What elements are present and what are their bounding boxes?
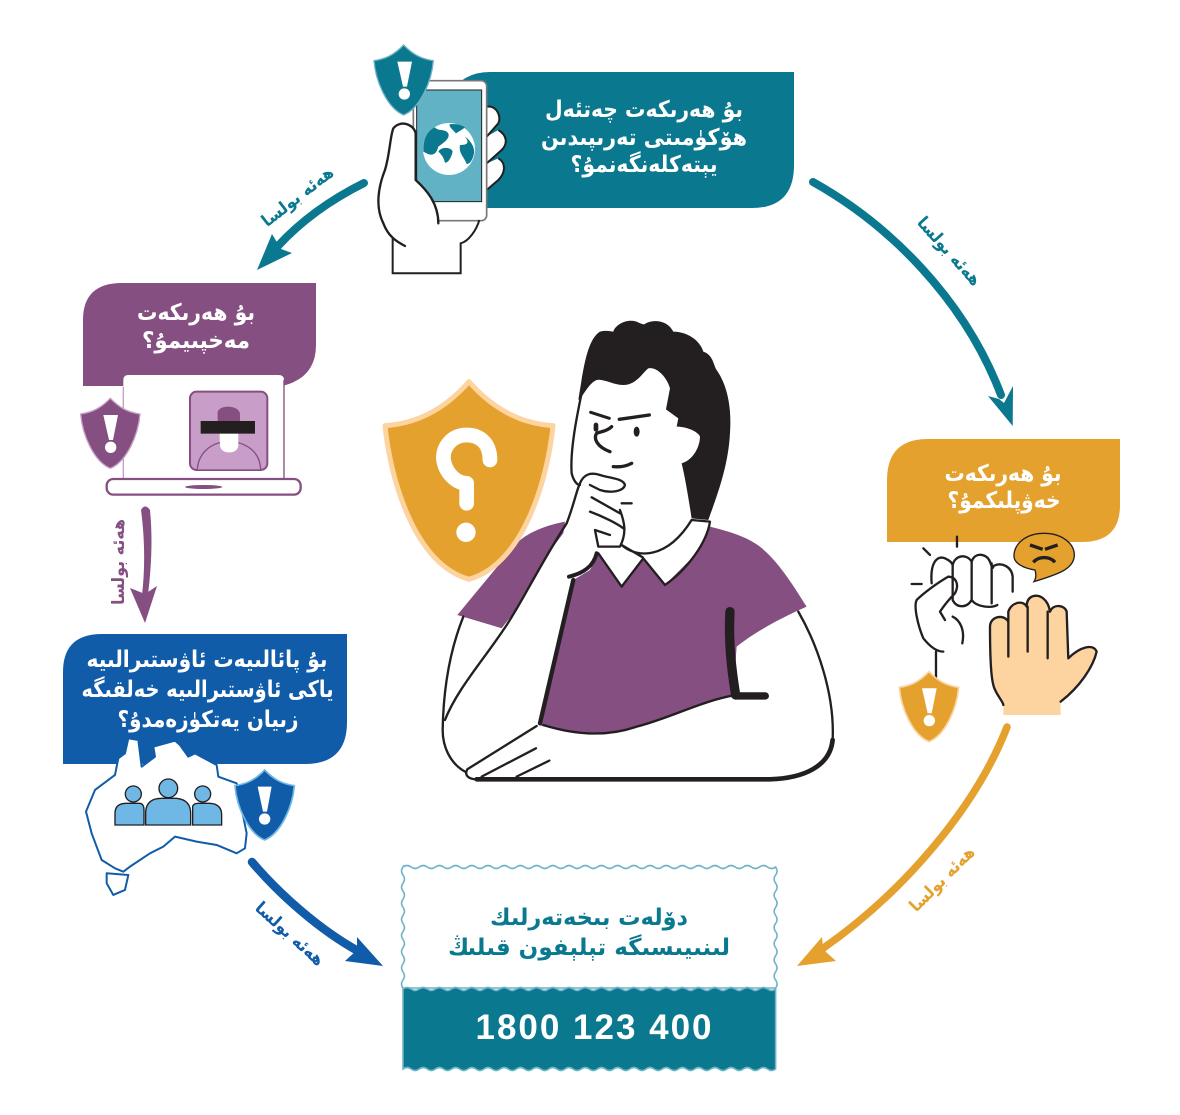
hotline text: [448, 905, 730, 961]
icon: teal warning shield: [374, 45, 433, 115]
arrow: purple to blue: [109, 506, 157, 623]
heading: teal question: [541, 97, 747, 178]
panel: dangerous question (orange): [887, 439, 1120, 742]
heading: orange question: [944, 461, 1062, 514]
icon: hand holding phone: [378, 81, 506, 273]
illustration: thinking man: [385, 321, 833, 779]
heading: teal question: بۇ ھەرىكەت چەتئەل: [545, 97, 743, 123]
heading: teal question: ھۆكۈمىتى تەرىپىدىن: [541, 125, 747, 151]
hotline text: دۆلەت بىخەتەرلىك: [490, 905, 688, 931]
arrow: teal to purple: [257, 163, 364, 270]
icon: purple warning shield: [81, 398, 140, 468]
heading: blue question: بۇ پائالىيەت ئاۋستىرالىيە: [86, 647, 328, 673]
man outlines: [443, 385, 833, 779]
hotline wavy top box: [402, 866, 777, 988]
arrow: blue to hotline: [251, 862, 383, 970]
man thick strokes: [477, 553, 833, 779]
hotline number panel: [403, 988, 776, 1070]
label: yes: ھەئە بولسا: [258, 163, 338, 231]
panel: harm to Australia question (blue): [63, 634, 347, 895]
panel: secret question (purple): [81, 283, 316, 495]
teal callout box: [450, 72, 794, 208]
heading: teal question: يېتەكلەنگەنمۇ؟: [570, 151, 718, 178]
heading: purple question: [137, 300, 255, 354]
heading: blue question: [82, 647, 334, 733]
man shirt: [457, 522, 807, 733]
icon: question shield: [385, 382, 553, 579]
panel: foreign government question (teal): [374, 45, 794, 273]
heading: orange question: بۇ ھەرىكەت: [944, 461, 1062, 487]
heading: blue question: زىيان يەتكۈزەمدۇ؟: [118, 707, 298, 733]
purple callout box: [83, 283, 316, 386]
man hair: [578, 321, 730, 520]
label: yes: ھەئە بولسا: [251, 898, 328, 970]
label: yes: ھەئە بولسا: [109, 519, 129, 605]
arrow: orange to hotline: [797, 727, 1007, 966]
label: yes: ھەئە بولسا: [906, 843, 979, 916]
icon: Australia map with people: [86, 738, 247, 895]
icon: laptop with masked profile: [107, 375, 301, 495]
orange callout box: [887, 439, 1120, 542]
icon: blue warning shield: [235, 770, 294, 840]
blue callout box: [63, 634, 347, 764]
heading: blue question: ياكى ئاۋستىرالىيە خەلقىگە: [82, 676, 334, 703]
heading: orange question: خەۋپلىكمۇ؟: [948, 488, 1060, 514]
heading: purple question: مەخپىيمۇ؟: [142, 328, 250, 354]
arrow: teal to orange: [813, 182, 1013, 426]
panel: hotline box: [402, 866, 777, 1070]
man face: [591, 412, 649, 467]
label: yes: ھەئە بولسا: [913, 213, 985, 290]
hotline number: 1800 123 400: [476, 1008, 712, 1047]
hotline text: لىنىيىسىگە تېلېفون قىلىڭ: [448, 934, 730, 961]
icon: fist, open hand and angry speech bubble: [912, 533, 1097, 715]
heading: purple question: بۇ ھەرىكەت: [137, 300, 255, 326]
icon: orange warning shield: [899, 672, 959, 742]
